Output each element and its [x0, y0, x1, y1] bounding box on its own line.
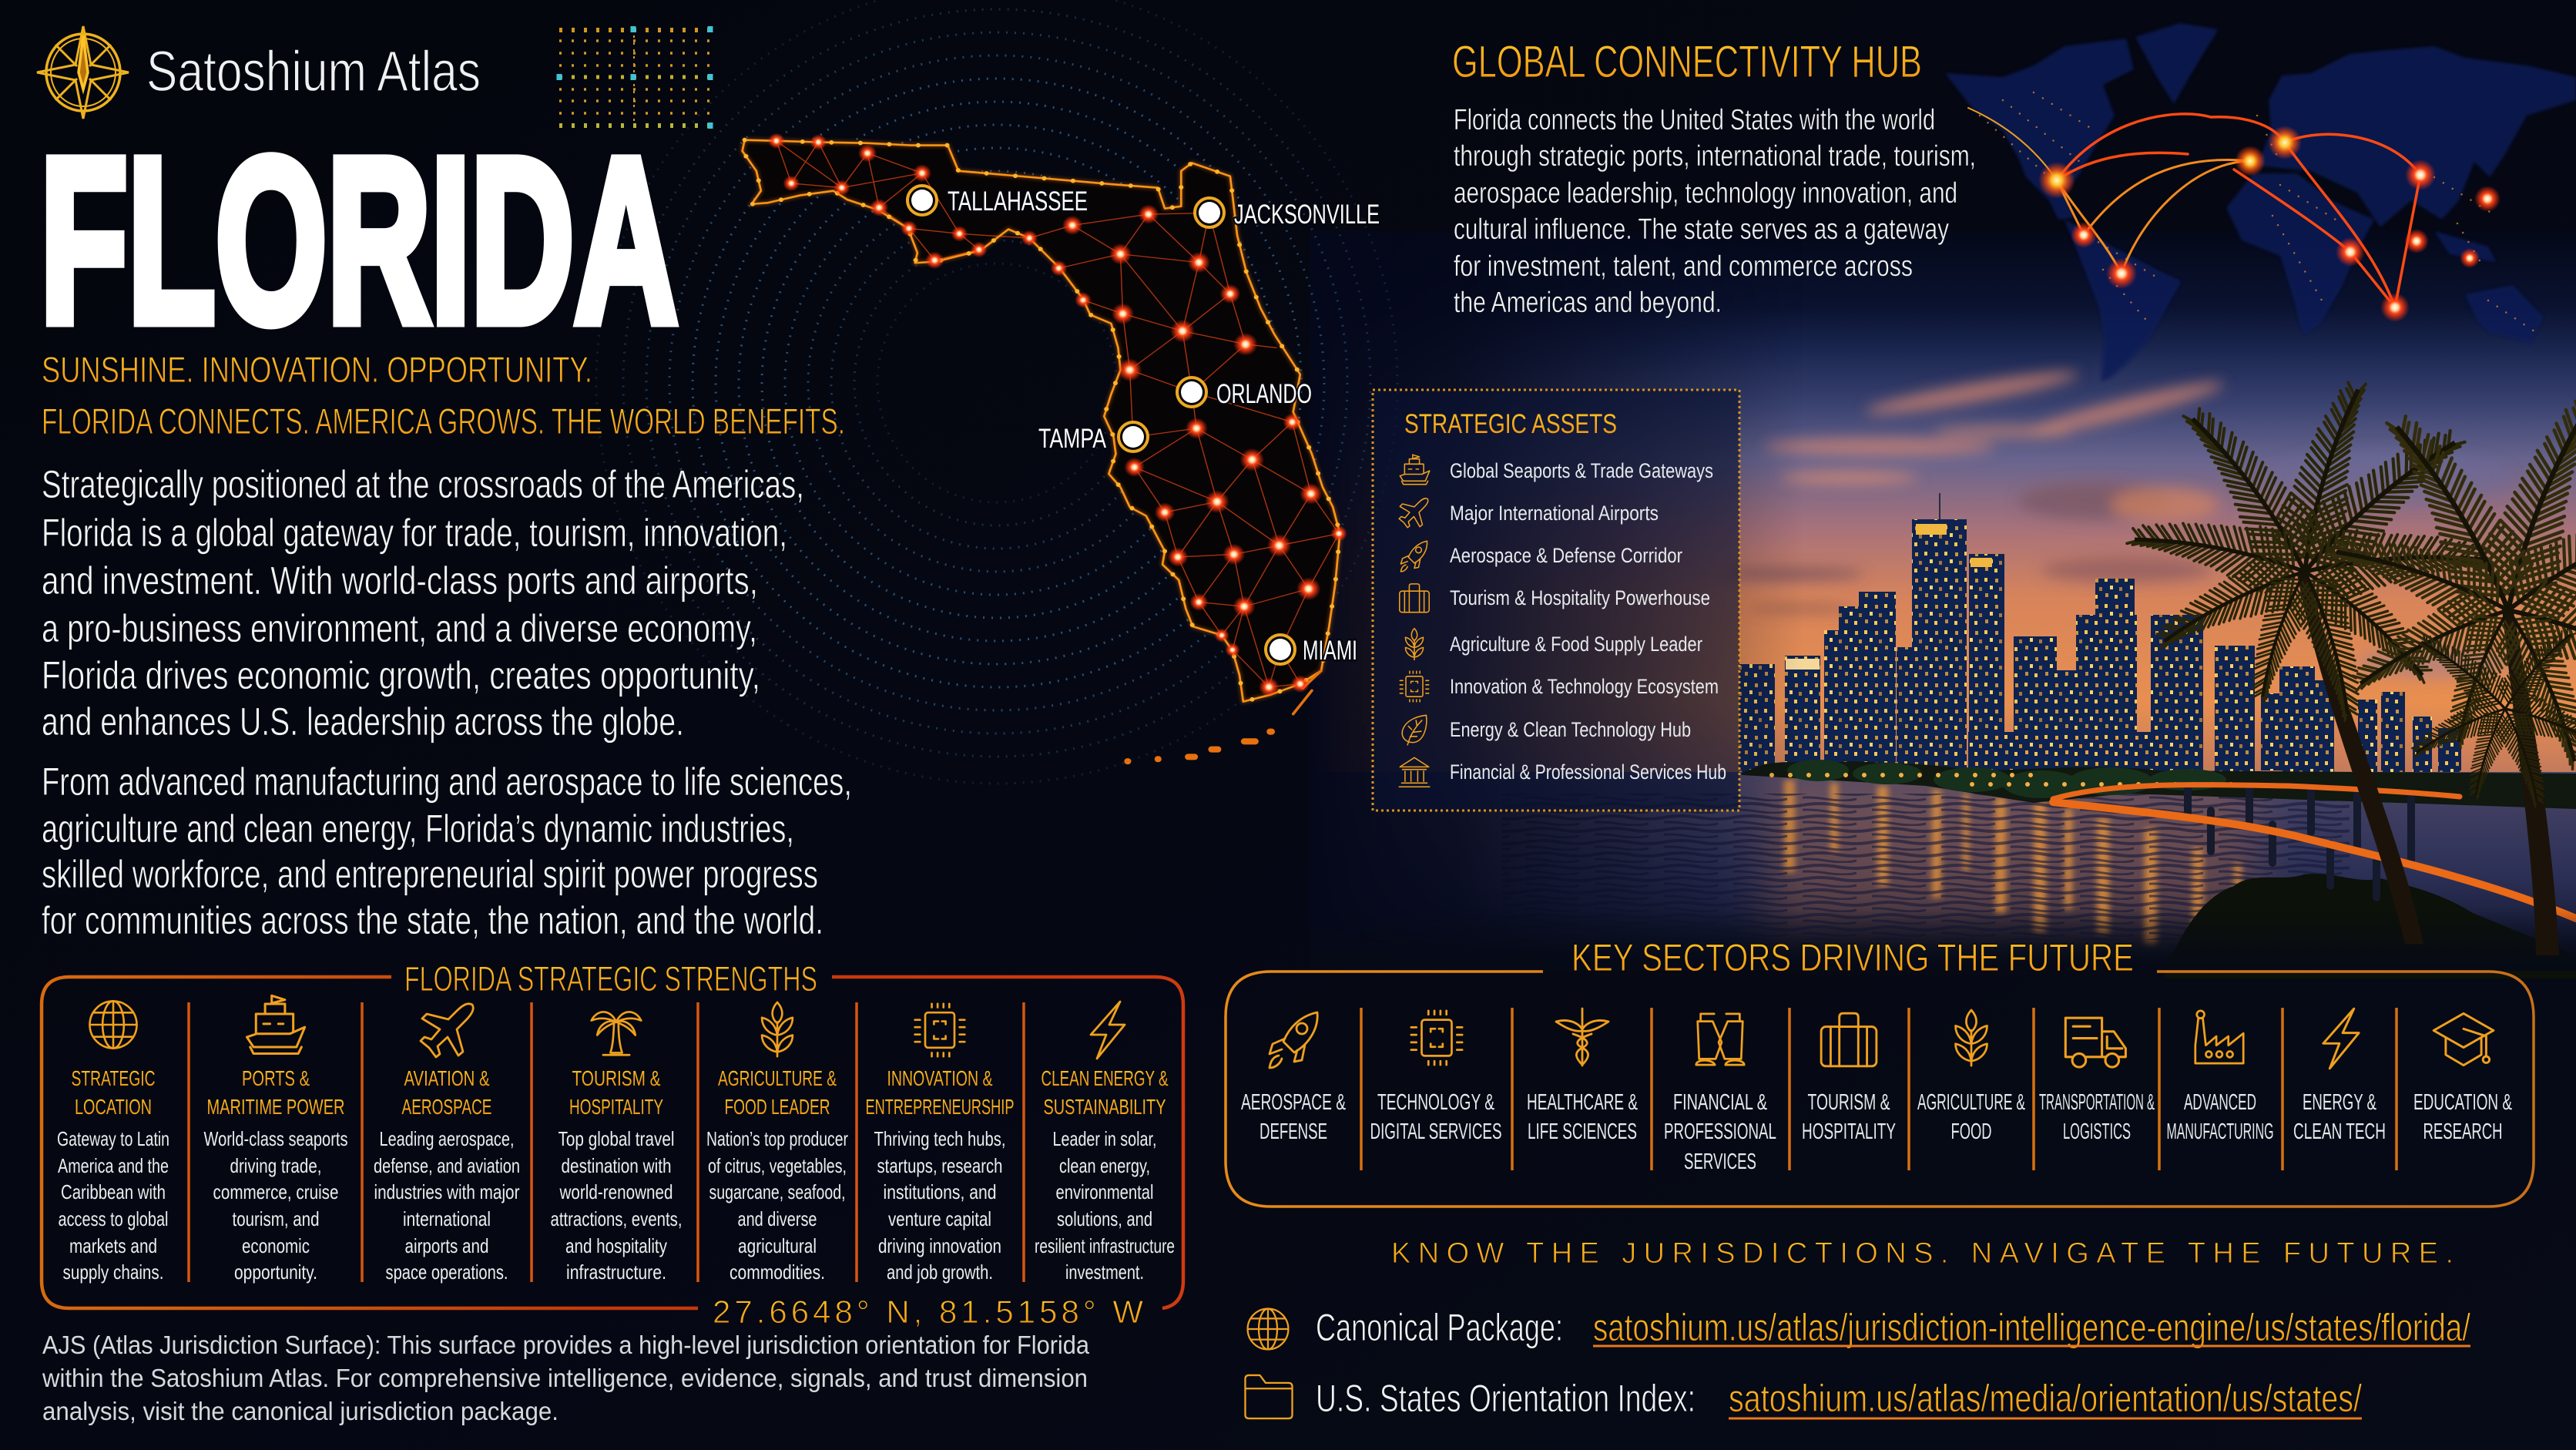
- global connectivity text: Florida connects the United States with the world: [1454, 104, 1935, 136]
- arcs: [1968, 108, 2420, 307]
- Florida network map: [743, 133, 1380, 761]
- global connectivity text: [1454, 104, 1976, 319]
- column: strategic location: access to global: [59, 1207, 168, 1230]
- sector: energy and clean tech: [2293, 1009, 2386, 1144]
- strengths heading: FLORIDA STRATEGIC STRENGTHS: [404, 959, 817, 999]
- column: aviation and aerospace: AEROSPACE: [402, 1095, 491, 1119]
- asset list: Innovation & Technology Ecosystem: [1450, 675, 1719, 698]
- panel: strategic assets: [1373, 390, 1739, 811]
- column: clean energy and sustainability: clean energy,: [1059, 1154, 1150, 1177]
- sector dividers: [1361, 1008, 2397, 1170]
- column: ports and maritime power: tourism, and: [233, 1207, 319, 1230]
- intro paragraph 2: skilled workforce, and entrepreneurial spirit power progress: [42, 852, 818, 896]
- intro paragraph 1: Florida is a global gateway for trade, tourism, innovation,: [42, 511, 787, 555]
- column: ports and maritime power: opportunity.: [234, 1260, 317, 1284]
- column: agriculture and food leader: AGRICULTURE &: [718, 1066, 837, 1090]
- column: innovation and entrepreneurship: ENTREPRENEURSHIP: [866, 1095, 1014, 1119]
- water glow: [1764, 782, 2257, 928]
- sector: financial and professional services: [1664, 1014, 1776, 1174]
- column: strategic location: supply chains.: [63, 1260, 163, 1284]
- skyline buildings: [1739, 493, 2461, 778]
- column: clean energy and sustainability: environmental: [1055, 1180, 1154, 1203]
- sector: aerospace and defense: AEROSPACE &: [1241, 1090, 1346, 1115]
- sector: transportation and logistics: TRANSPORTATION &: [2039, 1090, 2155, 1115]
- city marker: Miami: MIAMI: [1303, 636, 1357, 666]
- column: ports and maritime power: commerce, cruise: [213, 1180, 339, 1203]
- column: agriculture and food leader: commodities.: [730, 1260, 825, 1284]
- city marker: Jacksonville: [1195, 198, 1380, 230]
- sector: education and research: RESEARCH: [2423, 1119, 2502, 1144]
- sector: technology and digital services: DIGITAL SERVICES: [1370, 1119, 1502, 1144]
- sky: [1310, 231, 2576, 774]
- dotted rings behind Florida: [596, 0, 1397, 784]
- column: strategic location: STRATEGIC: [71, 1066, 156, 1090]
- sector: advanced manufacturing: MANUFACTURING: [2166, 1119, 2274, 1144]
- sectors heading: KEY SECTORS DRIVING THE FUTURE: [1571, 936, 2134, 979]
- bottom fade: [1310, 909, 2576, 971]
- sector: advanced manufacturing: [2166, 1011, 2274, 1144]
- column: clean energy and sustainability: resilient infrastructure: [1035, 1234, 1175, 1257]
- asset list: Aerospace & Defense Corridor: [1450, 544, 1682, 567]
- column: aviation and aerospace: space operations.: [385, 1260, 508, 1284]
- panel: key sectors driving the future: [1226, 936, 2534, 1207]
- asset list: Major International Airports: [1450, 502, 1659, 525]
- column: agriculture and food leader: Nation’s top producer: [706, 1127, 848, 1150]
- intro paragraph 1: Florida drives economic growth, creates opportunity,: [42, 653, 760, 697]
- florida keys: [1128, 670, 1321, 761]
- column: agriculture and food leader: sugarcane, seafood,: [709, 1180, 846, 1203]
- city marker: Jacksonville: JACKSONVILLE: [1234, 200, 1380, 230]
- footnote: AJS description: [42, 1331, 1090, 1425]
- asset list: Global Seaports & Trade Gateways: [1450, 459, 1713, 482]
- column: clean energy and sustainability: Leader in solar,: [1052, 1127, 1157, 1150]
- water reflections: [1784, 780, 2242, 944]
- column: innovation and entrepreneurship: venture capital: [888, 1207, 991, 1230]
- global connectivity text: for investment, talent, and commerce across: [1454, 250, 1913, 283]
- city marker: Orlando: [1177, 378, 1312, 409]
- sector: advanced manufacturing: ADVANCED: [2184, 1090, 2256, 1115]
- global connectivity text: the Americas and beyond.: [1454, 287, 1722, 319]
- link: canonical package: [1248, 1306, 2470, 1349]
- sector: healthcare and life sciences: LIFE SCIENCES: [1528, 1119, 1637, 1144]
- column: strategic location: LOCATION: [75, 1095, 152, 1119]
- column: tourism and hospitality: attractions, events,: [550, 1207, 683, 1230]
- intro paragraph 2: agriculture and clean energy, Florida’s dynamic industries,: [42, 807, 794, 851]
- intro paragraph 2: From advanced manufacturing and aerospace to life sciences,: [42, 760, 852, 804]
- sector: healthcare and life sciences: [1527, 1009, 1638, 1144]
- column: agriculture and food leader: FOOD LEADER: [724, 1095, 830, 1119]
- intro paragraph 1: and investment. With world-class ports and airports,: [42, 559, 758, 602]
- column: innovation and entrepreneurship: startups, research: [877, 1154, 1003, 1177]
- column: strategic location: [57, 1001, 169, 1284]
- sector: agriculture and food: FOOD: [1950, 1119, 1992, 1144]
- column: agriculture and food leader: [706, 1002, 848, 1284]
- sector: technology and digital services: TECHNOLOGY &: [1377, 1090, 1494, 1115]
- link: canonical package: Canonical Package:: [1316, 1306, 1563, 1349]
- column: clean energy and sustainability: CLEAN ENERGY &: [1041, 1066, 1169, 1090]
- clouds: [1726, 365, 2511, 678]
- footnote: AJS description: within the Satoshium Atlas. For comprehensive intelligence, evidence, signals, and trust dimension: [42, 1364, 1088, 1392]
- column: strategic location: markets and: [69, 1234, 157, 1257]
- column: tourism and hospitality: world-renowned: [559, 1180, 673, 1203]
- coordinates: 27.6648° N, 81.5158° W: [713, 1294, 1143, 1330]
- fades: [1310, 231, 1803, 971]
- column: agriculture and food leader: agricultural: [738, 1234, 817, 1257]
- palm trees: [2127, 378, 2576, 955]
- footnote: AJS description: analysis, visit the canonical jurisdiction package.: [42, 1397, 558, 1425]
- sector: financial and professional services: FINANCIAL &: [1673, 1090, 1767, 1115]
- column: ports and maritime power: PORTS &: [242, 1066, 310, 1090]
- dot matrix decoration: [559, 26, 711, 129]
- intro paragraph 1: and enhances U.S. leadership across the globe.: [42, 700, 684, 743]
- column: innovation and entrepreneurship: INNOVATION &: [887, 1066, 993, 1090]
- title: FLORIDA: [40, 110, 678, 371]
- heading: global connectivity hub: GLOBAL CONNECTIVITY HUB: [1452, 37, 1922, 87]
- sector: education and research: EDUCATION &: [2413, 1090, 2512, 1115]
- column: agriculture and food leader: and diverse: [738, 1207, 817, 1230]
- sector: agriculture and food: [1917, 1010, 2025, 1144]
- link: U.S. states orientation index: satoshium.us/atlas/media/orientation/us/states/: [1729, 1377, 2362, 1420]
- link: U.S. states orientation index: [1245, 1375, 2362, 1420]
- intro paragraph 1: a pro-business environment, and a diverse economy,: [42, 606, 757, 650]
- asset list: Energy & Clean Technology Hub: [1450, 718, 1691, 741]
- asset list: Agriculture & Food Supply Leader: [1450, 633, 1702, 656]
- column: aviation and aerospace: AVIATION &: [404, 1066, 490, 1090]
- sector: energy and clean tech: ENERGY &: [2303, 1090, 2376, 1115]
- column: innovation and entrepreneurship: [866, 1004, 1014, 1284]
- sector: energy and clean tech: CLEAN TECH: [2293, 1119, 2386, 1144]
- column: clean energy and sustainability: [1035, 1002, 1175, 1284]
- column: tourism and hospitality: Top global travel: [558, 1127, 675, 1150]
- sector: aerospace and defense: DEFENSE: [1259, 1119, 1327, 1144]
- intro paragraph 1: [42, 462, 804, 743]
- water ripples: [1502, 794, 2350, 940]
- column: agriculture and food leader: of citrus, vegetables,: [708, 1154, 847, 1177]
- column: ports and maritime power: driving trade,: [230, 1154, 322, 1177]
- panel: sunset skyline scene: [1310, 231, 2576, 978]
- asset list: Tourism & Hospitality Powerhouse: [1450, 586, 1710, 609]
- intro paragraph 2: [42, 760, 852, 942]
- sector: financial and professional services: SERVICES: [1684, 1150, 1756, 1174]
- tagline: FLORIDA CONNECTS. AMERICA GROWS. THE WORLD BENEFITS.: [42, 401, 845, 441]
- asset icons: [1399, 455, 1430, 787]
- sector: financial and professional services: PROFESSIONAL: [1664, 1119, 1776, 1144]
- tagline: SUNSHINE. INNOVATION. OPPORTUNITY.: [42, 349, 592, 390]
- column: tourism and hospitality: destination with: [561, 1154, 672, 1177]
- network nodes: [768, 133, 1347, 696]
- world map with connection arcs: [1945, 23, 2576, 381]
- panel: Florida strategic strengths: [42, 959, 1183, 1330]
- sector: tourism and hospitality: [1802, 1013, 1896, 1144]
- tagline: [42, 349, 845, 441]
- column: tourism and hospitality: and hospitality: [565, 1234, 667, 1257]
- city marker: Tampa: TAMPA: [1038, 424, 1106, 454]
- column: innovation and entrepreneurship: driving innovation: [878, 1234, 1001, 1257]
- column: aviation and aerospace: airports and: [405, 1234, 488, 1257]
- column: aviation and aerospace: defense, and aviation: [374, 1154, 520, 1177]
- city marker: Miami: [1266, 635, 1357, 666]
- sector: tourism and hospitality: HOSPITALITY: [1802, 1119, 1896, 1144]
- column: aviation and aerospace: industries with major: [374, 1180, 520, 1203]
- strategic assets heading: STRATEGIC ASSETS: [1404, 409, 1617, 439]
- column: innovation and entrepreneurship: and job growth.: [887, 1260, 993, 1284]
- column: innovation and entrepreneurship: institutions, and: [883, 1180, 997, 1203]
- sector: tourism and hospitality: TOURISM &: [1807, 1090, 1890, 1115]
- sectors frame: [1226, 972, 2534, 1207]
- continents: [1945, 23, 2576, 381]
- intro paragraph 2: for communities across the state, the nation, and the world.: [42, 898, 823, 942]
- column: ports and maritime power: economic: [242, 1234, 310, 1257]
- column: clean energy and sustainability: SUSTAINABILITY: [1043, 1095, 1166, 1119]
- column: tourism and hospitality: [550, 1012, 683, 1284]
- column: tourism and hospitality: TOURISM &: [572, 1066, 661, 1090]
- global connectivity text: through strategic ports, international trade, tourism,: [1454, 140, 1976, 173]
- connection nodes: [2038, 126, 2501, 322]
- city lights on continents: [1980, 92, 2534, 331]
- sector: technology and digital services: [1370, 1011, 1502, 1144]
- column: tourism and hospitality: HOSPITALITY: [569, 1095, 663, 1119]
- city marker: Tallahassee: TALLAHASSEE: [948, 186, 1088, 216]
- column: clean energy and sustainability: investment.: [1065, 1260, 1144, 1284]
- city marker: Tallahassee: [907, 186, 1088, 216]
- sector: aerospace and defense: [1241, 1012, 1346, 1144]
- city marker: Orlando: ORLANDO: [1216, 379, 1312, 409]
- sector: transportation and logistics: [2039, 1018, 2155, 1144]
- state outline and network: [743, 133, 1347, 761]
- column: innovation and entrepreneurship: Thriving tech hubs,: [874, 1127, 1006, 1150]
- logo: compass: [37, 26, 129, 119]
- panel frame: [42, 977, 1183, 1308]
- sector: transportation and logistics: LOGISTICS: [2063, 1119, 2131, 1144]
- foreground vegetation: [2165, 874, 2576, 978]
- sector: education and research: [2413, 1013, 2512, 1144]
- column: ports and maritime power: MARITIME POWER: [206, 1095, 345, 1119]
- column: clean energy and sustainability: solutions, and: [1057, 1207, 1152, 1230]
- column: strategic location: Gateway to Latin: [57, 1127, 169, 1150]
- column: aviation and aerospace: [374, 1004, 520, 1284]
- asset list: [1450, 459, 1726, 784]
- footnote: AJS description: AJS (Atlas Jurisdiction Surface): This surface provides a high-level jurisdiction orientation for Florida: [42, 1331, 1090, 1359]
- sector: healthcare and life sciences: HEALTHCARE &: [1527, 1090, 1638, 1115]
- intro paragraph 1: Strategically positioned at the crossroads of the Americas,: [42, 462, 804, 506]
- column: aviation and aerospace: international: [403, 1207, 491, 1230]
- brand name: Satoshium Atlas: [146, 39, 481, 103]
- global connectivity text: cultural influence. The state serves as a gateway: [1454, 213, 1949, 246]
- link: U.S. states orientation index: U.S. States Orientation Index:: [1316, 1377, 1696, 1420]
- column: strategic location: Caribbean with: [61, 1180, 166, 1203]
- sector: agriculture and food: AGRICULTURE &: [1917, 1090, 2025, 1115]
- column: strategic location: America and the: [58, 1154, 169, 1177]
- column: ports and maritime power: World-class seaports: [203, 1127, 348, 1150]
- slogan: KNOW THE JURISDICTIONS. NAVIGATE THE FUTURE.: [1391, 1237, 2454, 1270]
- bridge: [2053, 785, 2576, 918]
- global connectivity text: aerospace leadership, technology innovation, and: [1454, 177, 1957, 210]
- column: aviation and aerospace: Leading aerospace,: [379, 1127, 515, 1150]
- shoreline trees: [1739, 760, 2576, 809]
- water: [1310, 772, 2576, 965]
- column: ports and maritime power: [203, 995, 348, 1284]
- column dividers: [189, 1002, 1024, 1282]
- column: tourism and hospitality: infrastructure.: [566, 1260, 666, 1284]
- asset list: Financial & Professional Services Hub: [1450, 760, 1726, 784]
